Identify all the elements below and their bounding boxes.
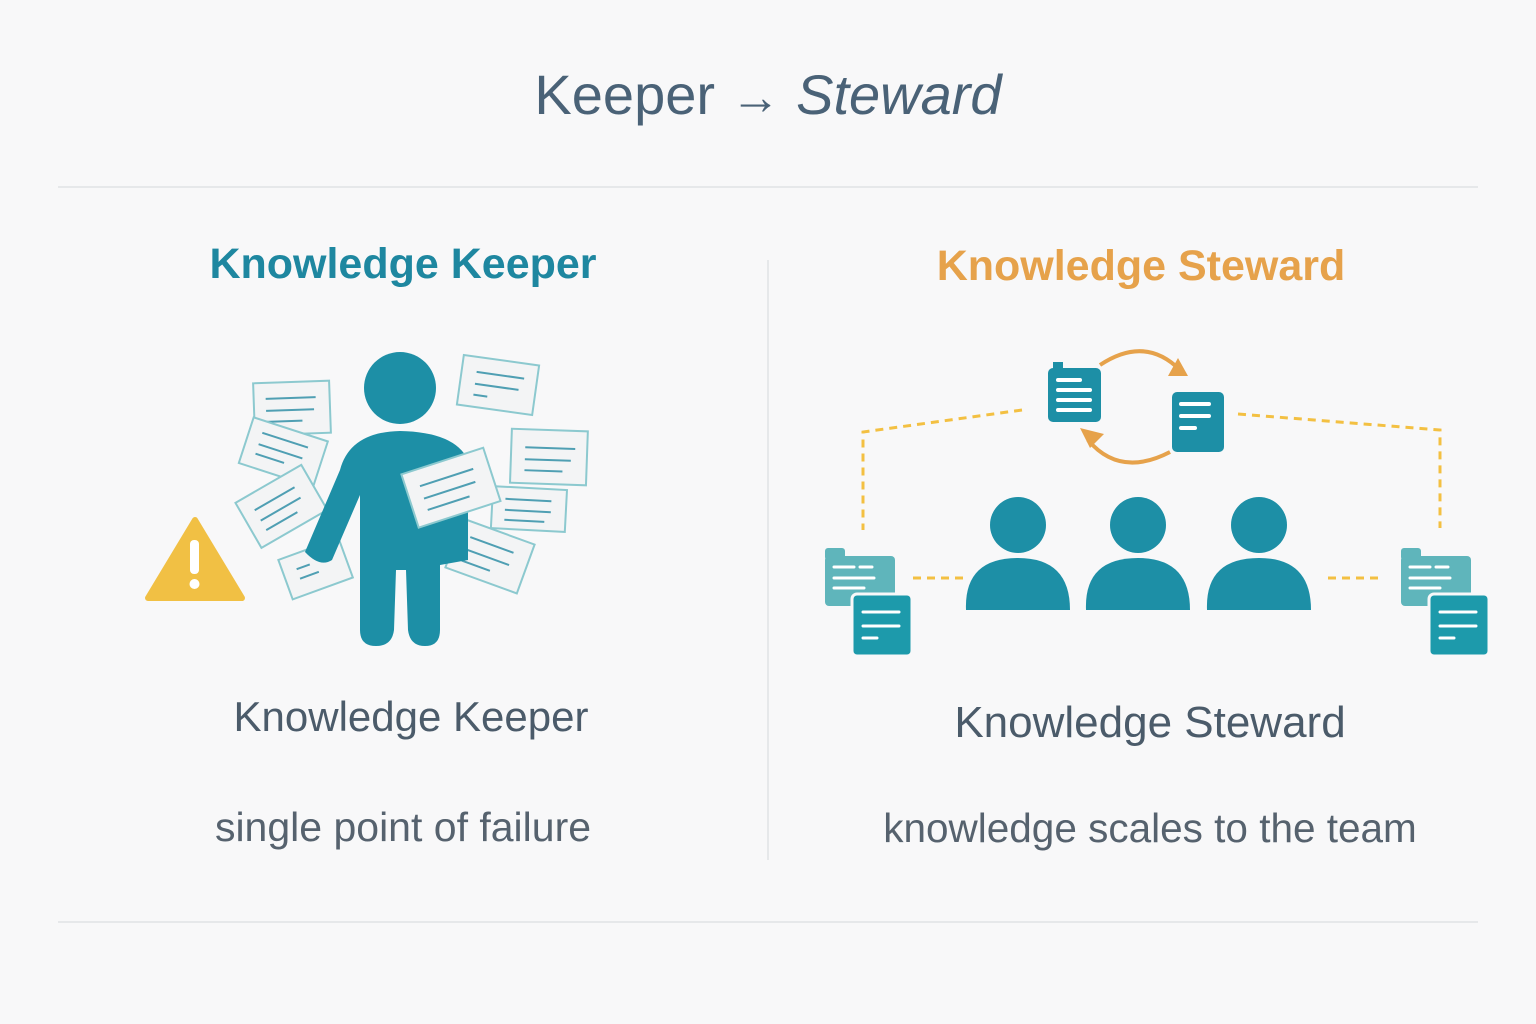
illustration: steward team [825, 349, 1488, 654]
heading: knowledge steward: Knowledge Steward [937, 242, 1345, 290]
docs [1048, 362, 1224, 452]
caption: steward: knowledge scales to the team [883, 805, 1417, 851]
people [966, 497, 1311, 610]
papers [235, 355, 588, 599]
person [305, 352, 468, 646]
cycle arrows [1088, 351, 1180, 463]
heading: knowledge keeper: Knowledge Keeper [209, 240, 597, 288]
files [825, 548, 1471, 606]
caption: keeper: single point of failure [215, 804, 591, 850]
icon: warning [148, 520, 242, 598]
label: keeper: Knowledge Keeper [234, 693, 588, 740]
label: steward: Knowledge Steward [954, 698, 1346, 747]
illustration: keeper with papers [145, 352, 589, 646]
title: Keeper → Steward [534, 63, 1002, 126]
